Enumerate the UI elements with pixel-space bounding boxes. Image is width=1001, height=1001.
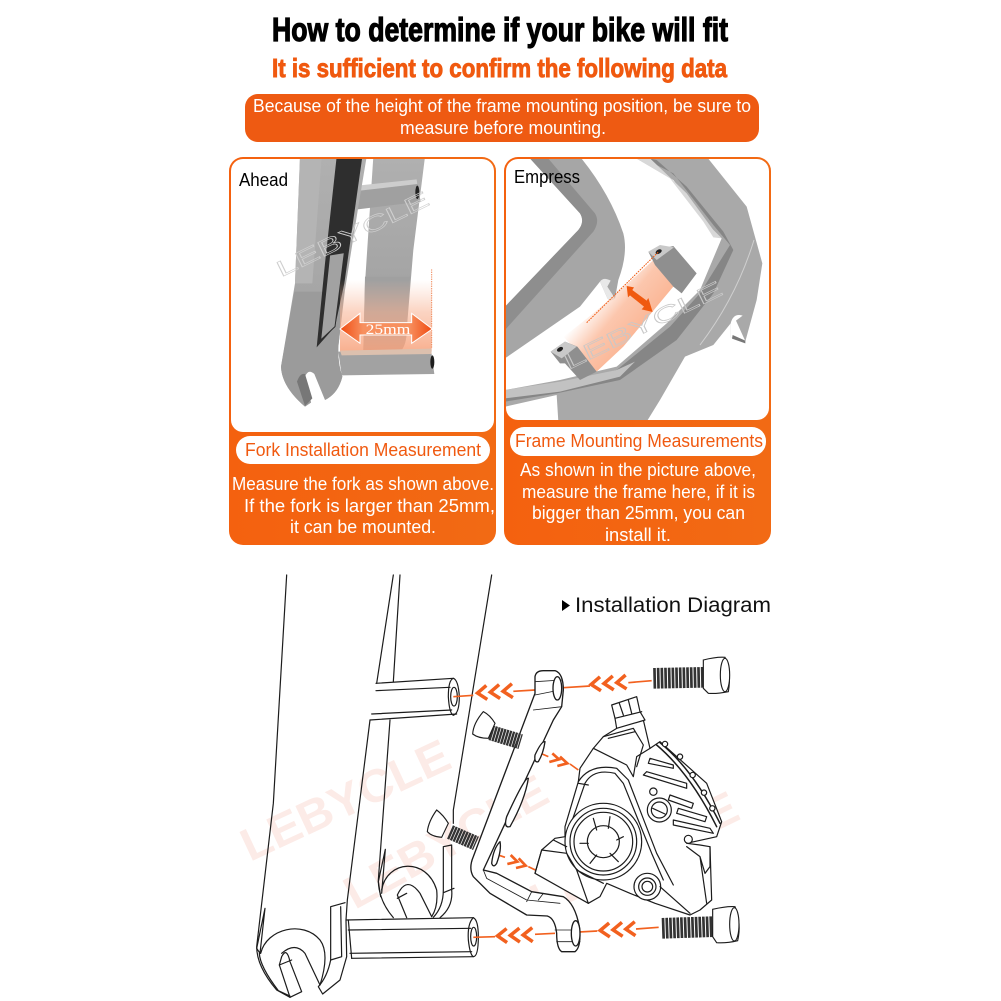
diagram: mounting bracket xyxy=(471,671,580,952)
fork description: it can be mounted. xyxy=(290,517,436,537)
subtitle: It is sufficient to confirm the following data xyxy=(272,53,727,83)
frame description: As shown in the picture above, xyxy=(520,460,756,480)
diagram: disc brake caliper xyxy=(535,697,722,915)
fork illustration: LEBYCLE xyxy=(272,186,433,282)
notice banner: Because of the height of the frame mounting position, be sure to xyxy=(253,96,751,116)
panel: fork measurement xyxy=(229,157,496,545)
diagram: fork line art xyxy=(257,575,492,997)
watermarks: LEBYCLE xyxy=(335,764,557,919)
frame description: bigger than 25mm, you can xyxy=(532,503,745,523)
label pill: frame mounting xyxy=(510,427,766,456)
frame illustration: LEBYCLE xyxy=(560,276,726,374)
fork description xyxy=(232,474,495,537)
bolt: top right xyxy=(653,657,730,693)
frame description: install it. xyxy=(605,525,671,545)
frame illustration xyxy=(505,157,762,422)
label pill: fork installation: Fork Installation Measurement xyxy=(245,440,481,460)
arrow chevrons xyxy=(477,675,635,943)
fork illustration: 25mm xyxy=(366,322,410,338)
fork illustration xyxy=(272,157,434,408)
label pill: frame mounting: Frame Mounting Measurements xyxy=(515,431,763,451)
notice banner: measure before mounting. xyxy=(400,118,606,138)
frame description xyxy=(520,460,756,545)
watermarks xyxy=(232,729,747,926)
watermarks: LEBYCLE xyxy=(522,781,747,926)
diagram: orange arrow guides xyxy=(453,675,659,943)
bolt: bottom right xyxy=(662,907,739,943)
label: Empress: Empress xyxy=(514,167,580,187)
label: Ahead: Ahead xyxy=(239,170,288,190)
bolt: countersunk upper xyxy=(473,712,521,742)
fork description: If the fork is larger than 25mm, xyxy=(244,496,495,516)
notice banner xyxy=(245,94,759,142)
panel: frame measurement xyxy=(504,157,771,545)
watermarks: LEBYCLE xyxy=(232,729,458,871)
heading: installation diagram: Installation Diagram xyxy=(575,594,771,617)
title: How to determine if your bike will fit xyxy=(272,11,728,48)
bolt: countersunk lower xyxy=(427,810,476,843)
label pill: fork installation xyxy=(236,436,490,464)
fork description: Measure the fork as shown above. xyxy=(232,474,494,494)
diagram: bolts xyxy=(427,657,739,943)
frame description: measure the frame here, if it is xyxy=(522,482,755,502)
